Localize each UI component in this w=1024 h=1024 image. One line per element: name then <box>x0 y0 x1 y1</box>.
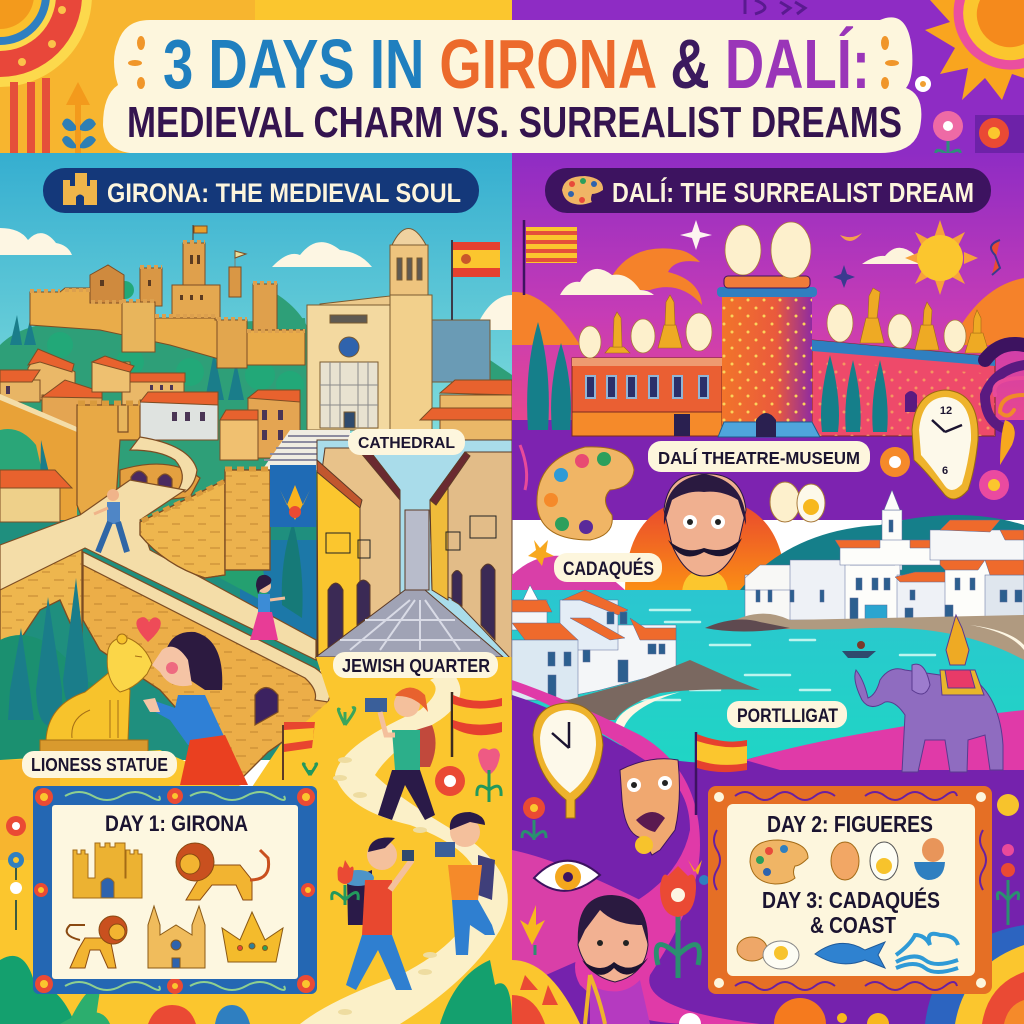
medieval wall walkway <box>0 405 330 780</box>
purple spiral <box>985 344 1024 430</box>
decorative plant <box>62 82 96 153</box>
right wall <box>812 340 995 436</box>
cypress trees <box>527 322 888 432</box>
icon: castle <box>73 843 142 898</box>
tourist with camera <box>435 812 495 955</box>
label: lioness statue <box>22 751 177 778</box>
Spanish flag on the coast <box>696 732 747 815</box>
castle windows <box>100 255 203 300</box>
boat <box>842 641 876 658</box>
palette <box>537 447 634 540</box>
town houses <box>0 349 300 460</box>
sea <box>512 590 1024 770</box>
purple elephant <box>855 615 1003 772</box>
Dalí portrait <box>664 474 746 576</box>
background: left yellow header <box>0 0 512 153</box>
background: right purple header <box>512 0 1024 153</box>
lower green and blue backdrop <box>0 520 320 760</box>
panel: Dalí <box>512 153 1024 1024</box>
icon: boiled egg <box>870 842 898 880</box>
Dalí Theatre-Museum <box>527 222 995 437</box>
hills <box>0 318 320 520</box>
Cadaqués town <box>745 490 1024 625</box>
decorative mark top centre-right <box>745 0 805 14</box>
cypress trees and shrubs <box>0 578 112 760</box>
bottom-left pattern <box>512 960 580 1024</box>
house windows <box>6 385 283 440</box>
water ripples <box>640 610 935 700</box>
banner on wall <box>270 465 316 527</box>
icon: palette <box>750 840 808 884</box>
heading: Day 3: DAY 3: CADAQUÉS <box>762 886 940 913</box>
decorative purple swoosh by palette <box>520 445 527 490</box>
section header: Dalí <box>545 168 991 213</box>
orange hills <box>512 292 580 345</box>
Spanish flag on path <box>452 692 502 757</box>
label: Portlligat <box>727 701 847 728</box>
Cathedral <box>307 228 490 430</box>
hillside wall at far left <box>0 394 77 525</box>
icon: fish <box>815 942 885 968</box>
decorative flowers right <box>880 420 1015 500</box>
title banner <box>103 17 921 153</box>
icon: cathedral <box>148 906 205 968</box>
melting clock top <box>912 390 978 499</box>
distant hill behind town <box>740 515 1024 620</box>
bottom decorative ornaments <box>679 998 889 1024</box>
heading: coast: & COAST <box>810 912 896 938</box>
title line 1: 3 DAYS IN GIRONA & DALÍ: <box>163 25 870 103</box>
sun <box>905 220 978 295</box>
walking girl on wall <box>250 575 285 640</box>
coast strip <box>705 614 1024 660</box>
icon: eggs <box>737 937 799 969</box>
panel: Day 1 itinerary <box>33 786 317 994</box>
panel: Day 2 and 3 itinerary <box>708 786 992 994</box>
clouds <box>0 228 512 330</box>
flowers on path <box>303 708 501 905</box>
label: Jewish quarter: JEWISH QUARTER <box>342 656 490 676</box>
lower purple <box>512 420 1024 520</box>
sunset <box>625 498 786 592</box>
winding footpath <box>300 670 508 1024</box>
icon: crown <box>222 912 283 962</box>
surreal eye <box>534 861 600 891</box>
rocky shoreline <box>550 660 760 735</box>
heading text: GIRONA: THE MEDIEVAL SOUL <box>107 178 461 208</box>
left margin flowers <box>6 816 26 930</box>
clouds <box>560 248 936 295</box>
left wing <box>572 358 722 434</box>
tourist with backpack <box>342 838 414 990</box>
stairs <box>262 430 350 470</box>
icon: lion <box>176 843 269 900</box>
label: cathedral <box>348 429 465 455</box>
label: Cadaqués: CADAQUÉS <box>563 558 654 580</box>
eggs by portrait <box>770 482 825 522</box>
heart <box>136 617 161 642</box>
wall battlements <box>78 403 270 521</box>
melting clock top: 6 <box>942 465 948 477</box>
tower <box>722 290 812 435</box>
label: Portlligat: PORTLLIGAT <box>737 706 838 727</box>
icon: wave <box>896 934 958 972</box>
bottom ground <box>512 680 1024 1024</box>
bottom-right ornament <box>925 925 1024 1024</box>
tourist with orange cap <box>365 688 436 820</box>
pink ground behind Cadaqués <box>512 556 625 590</box>
woman kissing the lioness <box>143 632 248 785</box>
sky <box>0 153 512 433</box>
decorative sun top-left <box>0 0 92 87</box>
melting clock top: 12 <box>940 405 952 417</box>
walker on wall <box>94 489 127 552</box>
decorative red stripes <box>10 78 50 153</box>
left decorative flowers <box>520 540 709 955</box>
icon: egg <box>831 842 859 880</box>
Dalí portrait lower <box>578 895 650 1024</box>
Portlligat coastal town <box>512 585 676 700</box>
label: Dalí Theatre-Museum <box>648 441 870 472</box>
lioness statue <box>40 634 152 753</box>
icon: palette <box>562 176 603 205</box>
tulip <box>656 866 699 978</box>
melting clock lower left <box>533 703 603 818</box>
label: cathedral: CATHEDRAL <box>358 435 455 452</box>
icon: castle <box>63 173 97 205</box>
right-side house <box>420 380 512 455</box>
path stepping stones <box>333 757 437 1015</box>
orange swoosh <box>605 248 702 305</box>
melting face <box>620 759 679 855</box>
label: lioness statue: LIONESS STATUE <box>31 755 168 775</box>
bottom foliage <box>0 956 512 1024</box>
sky <box>512 153 1024 423</box>
small flag by wall <box>283 722 315 780</box>
castle battlements <box>30 242 305 331</box>
section header: Girona <box>43 168 479 213</box>
Jewish quarter alley <box>316 440 512 660</box>
Catalan flag <box>524 220 577 295</box>
Spanish flag by cathedral <box>452 240 500 320</box>
eggs <box>579 222 966 358</box>
label: Dalí Theatre-Museum: DALÍ THEATRE-MUSEUM <box>658 447 860 468</box>
icon: broken shell <box>914 838 945 880</box>
heading: Day 2: DAY 2: FIGUERES <box>767 811 933 837</box>
gold statues <box>605 288 989 353</box>
heading: Day 1: DAY 1: GIRONA <box>105 811 248 836</box>
icon: small lion <box>67 916 127 968</box>
castle on the hill <box>30 225 305 368</box>
yellow ground <box>0 657 512 1024</box>
sparkles and bird <box>680 220 1000 288</box>
panel: Girona <box>0 153 512 1024</box>
right margin decorations <box>997 794 1019 925</box>
small house on far left <box>0 470 72 522</box>
decorative flowers top-right <box>915 76 1024 167</box>
decorative sun top-right <box>925 0 1024 100</box>
label: Cadaqués <box>554 553 662 582</box>
